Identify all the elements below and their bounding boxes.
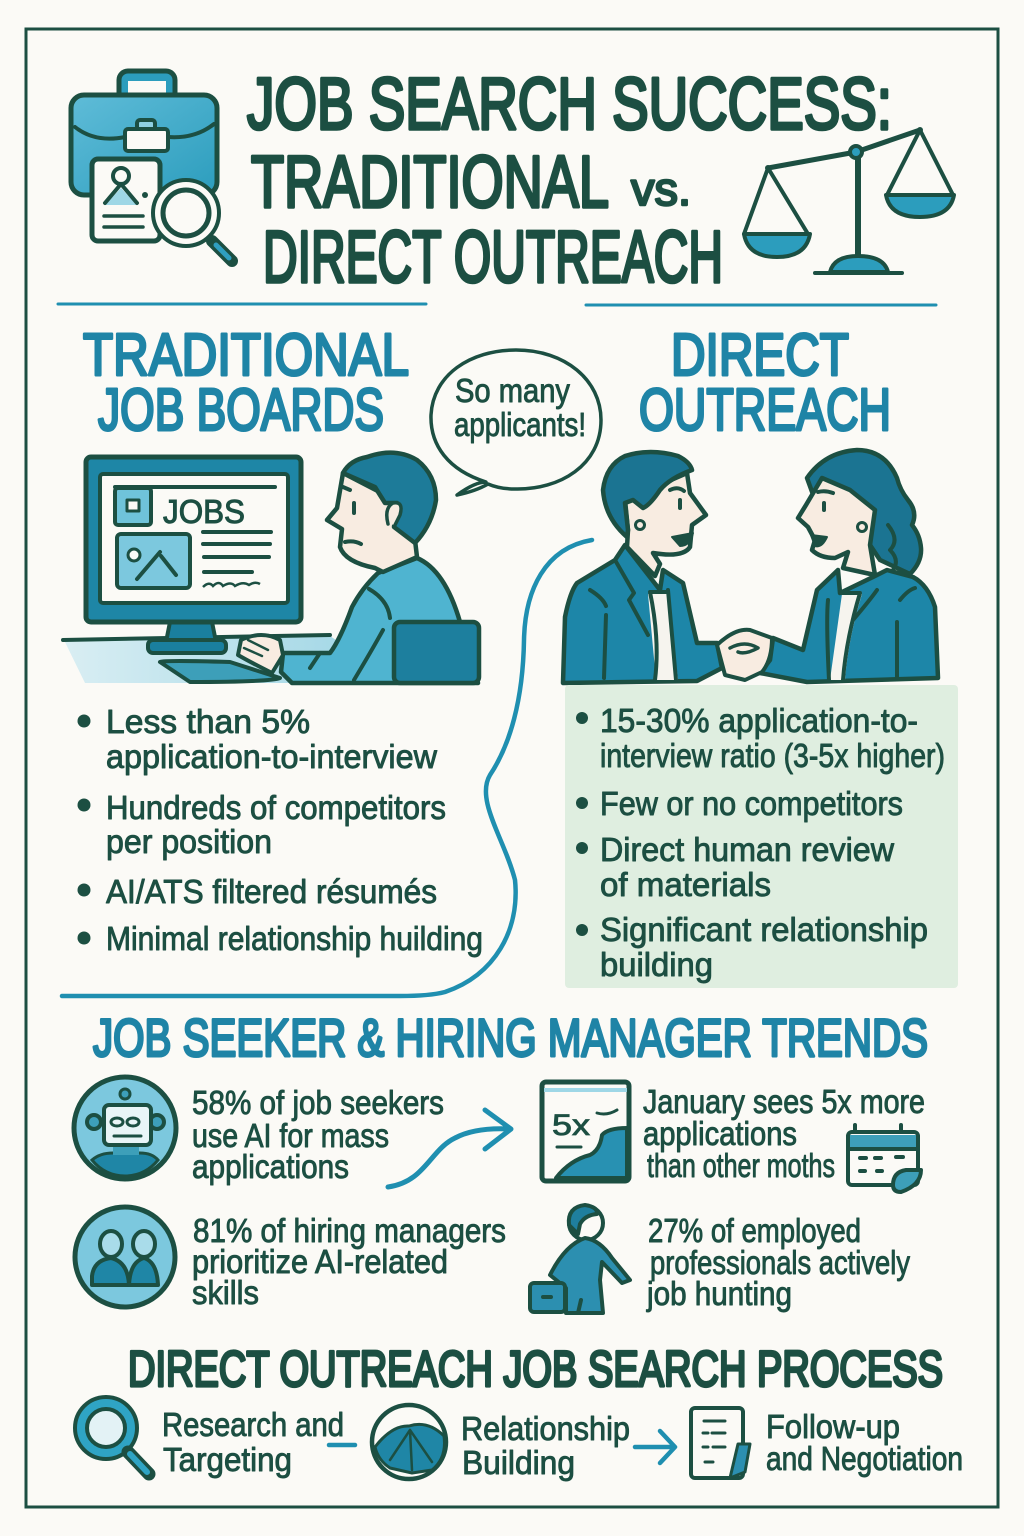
text: step research and targeting: Research and — [162, 1406, 344, 1443]
icon: balance scales — [744, 127, 954, 273]
text: January stat — [643, 1083, 925, 1184]
title: vs. — [631, 163, 691, 215]
text: January stat: applications — [643, 1115, 797, 1152]
heading: direct outreach — [639, 322, 891, 443]
text: step relationship building — [461, 1410, 630, 1481]
text: step follow-up and negotiation: and Negotiation — [766, 1440, 963, 1477]
text: 81% stat: prioritize AI-related — [192, 1243, 448, 1280]
heading: traditional job boards — [83, 322, 409, 443]
illustration: two people shaking hands — [563, 450, 938, 683]
illustration: man at computer viewing job board — [63, 453, 479, 683]
text: 27% stat: 27% of employed — [648, 1212, 861, 1249]
panel: direct outreach bullet list: of materials — [600, 866, 771, 903]
clasped hands — [717, 630, 772, 680]
text: 27% stat: job hunting — [646, 1275, 792, 1312]
panel: traditional job board bullet list: per position — [106, 823, 272, 860]
title: TRADITIONAL — [251, 142, 609, 223]
desk — [64, 636, 400, 683]
icon: AI robot — [74, 1077, 176, 1179]
arrow: step connector — [329, 1443, 355, 1447]
title — [247, 64, 892, 298]
icon: 5x applications chart: 5x — [552, 1109, 590, 1142]
text: 58% stat: 58% of job seekers — [192, 1084, 444, 1121]
text: step follow-up and negotiation: Follow-up — [766, 1408, 900, 1445]
speech bubble — [431, 350, 601, 495]
icon: walking professional with briefcase — [530, 1205, 630, 1313]
panel: traditional job board bullet list: application-to-interview — [106, 738, 437, 775]
panel: traditional job board bullet list: Hundreds of competitors — [106, 789, 446, 826]
divider left — [58, 302, 426, 306]
icon: handshake in circle step — [372, 1405, 446, 1479]
divider right — [586, 304, 936, 306]
monitor: JOBS — [163, 493, 245, 530]
text: January stat: than other moths — [647, 1147, 835, 1184]
text: 58% stat — [192, 1084, 444, 1185]
panel: direct outreach bullet list: building — [600, 946, 713, 983]
speech bubble: applicants! — [454, 406, 586, 443]
text: January stat: January sees 5x more — [643, 1083, 925, 1120]
panel: direct outreach bullet list: interview ratio (3-5x higher) — [600, 737, 945, 774]
speech bubble: So many — [455, 372, 570, 409]
curved section divider — [62, 540, 592, 996]
panel: traditional job board bullet list: Minimal relationship huilding — [106, 920, 483, 957]
keyboard — [160, 661, 280, 682]
icon: magnifier step — [75, 1397, 149, 1474]
icon: 5x applications chart — [542, 1082, 629, 1181]
panel: traditional job board bullet list: AI/ATS filtered résumés — [106, 873, 437, 910]
panel: direct outreach bullet list: Significant relationship — [600, 911, 928, 948]
right person — [760, 450, 938, 682]
icon: document step — [691, 1408, 750, 1478]
heading: traditional job boards: JOB BOARDS — [98, 377, 384, 443]
text: step research and targeting: Targeting — [163, 1441, 292, 1478]
text: 27% stat — [646, 1212, 910, 1312]
icon: briefcase with resume and magnifier — [71, 71, 232, 261]
panel: direct outreach bullet list: Few or no competitors — [600, 785, 903, 822]
heading: direct outreach: DIRECT — [671, 322, 849, 388]
title: DIRECT OUTREACH — [263, 217, 723, 298]
icon: calendar — [848, 1125, 921, 1192]
icon: collaborating people — [75, 1207, 175, 1307]
arrow: step arrow — [635, 1431, 675, 1463]
text: step relationship building: Relationship — [461, 1410, 630, 1447]
panel: direct outreach bullet list: Direct human review — [600, 831, 894, 868]
text: 58% stat: use AI for mass — [192, 1117, 389, 1154]
text: step follow-up and negotiation — [766, 1408, 963, 1477]
text: 27% stat: professionals actively — [650, 1244, 910, 1281]
text: step relationship building: Building — [462, 1444, 575, 1481]
arrow: trend — [388, 1110, 511, 1187]
panel: direct outreach bullet list: 15-30% application-to- — [600, 702, 918, 739]
left person — [563, 452, 722, 683]
text: step research and targeting — [162, 1406, 344, 1478]
panel: traditional job board bullet list: Less than 5% — [106, 703, 310, 740]
panel: direct outreach bullet list — [565, 685, 958, 988]
text: 81% stat: 81% of hiring managers — [193, 1212, 506, 1249]
person — [238, 453, 479, 683]
monitor — [86, 457, 301, 653]
text: 81% stat: skills — [192, 1274, 259, 1311]
text: 81% stat — [192, 1212, 506, 1311]
text: 58% stat: applications — [192, 1148, 349, 1185]
heading: direct outreach: OUTREACH — [639, 377, 891, 443]
panel: traditional job board bullet list — [78, 703, 483, 957]
heading: traditional job boards: TRADITIONAL — [83, 322, 409, 388]
